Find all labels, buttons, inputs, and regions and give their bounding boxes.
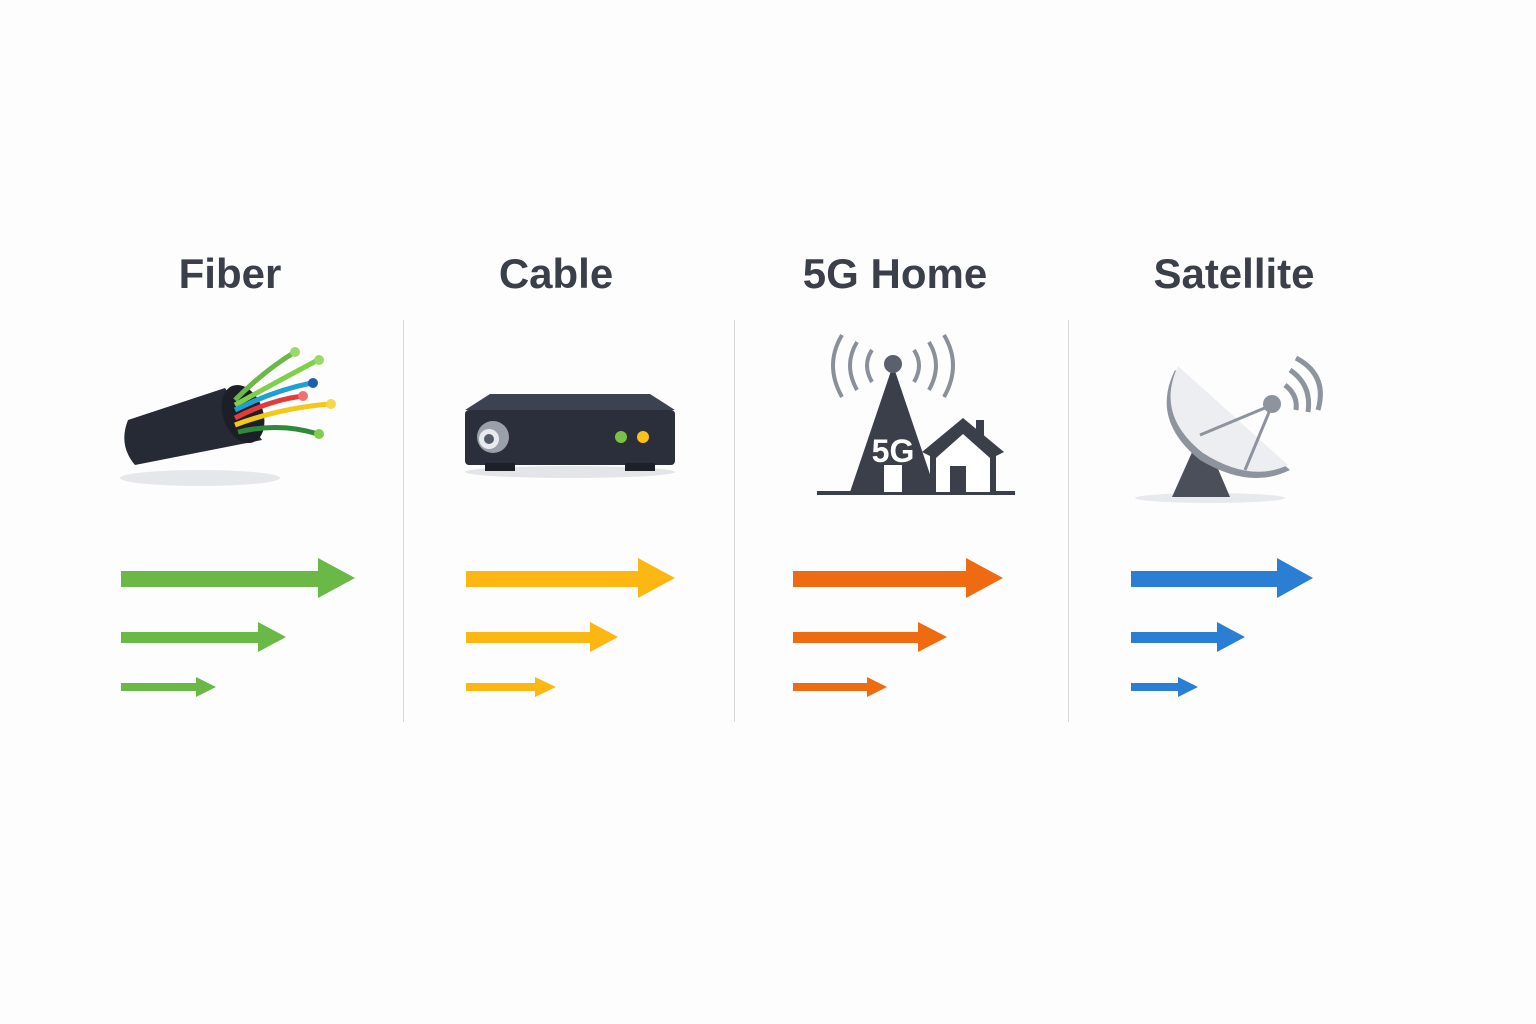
arrows: satellite [1131,558,1313,697]
icon: cable modem [465,394,675,478]
title: Satellite: Satellite [1153,250,1315,297]
arrows: fiber [121,558,355,697]
title: Cable: Cable [499,250,613,297]
icon: satellite dish [1135,358,1320,503]
icon: fiber cable [120,347,336,486]
arrows: cable [466,558,675,697]
icon: 5G tower with house [817,335,1015,495]
title: 5G Home: 5G Home [803,250,987,297]
title: Fiber: Fiber [179,250,281,297]
icon: 5G tower with house: 5G [872,433,914,469]
arrows: 5G [793,558,1003,697]
